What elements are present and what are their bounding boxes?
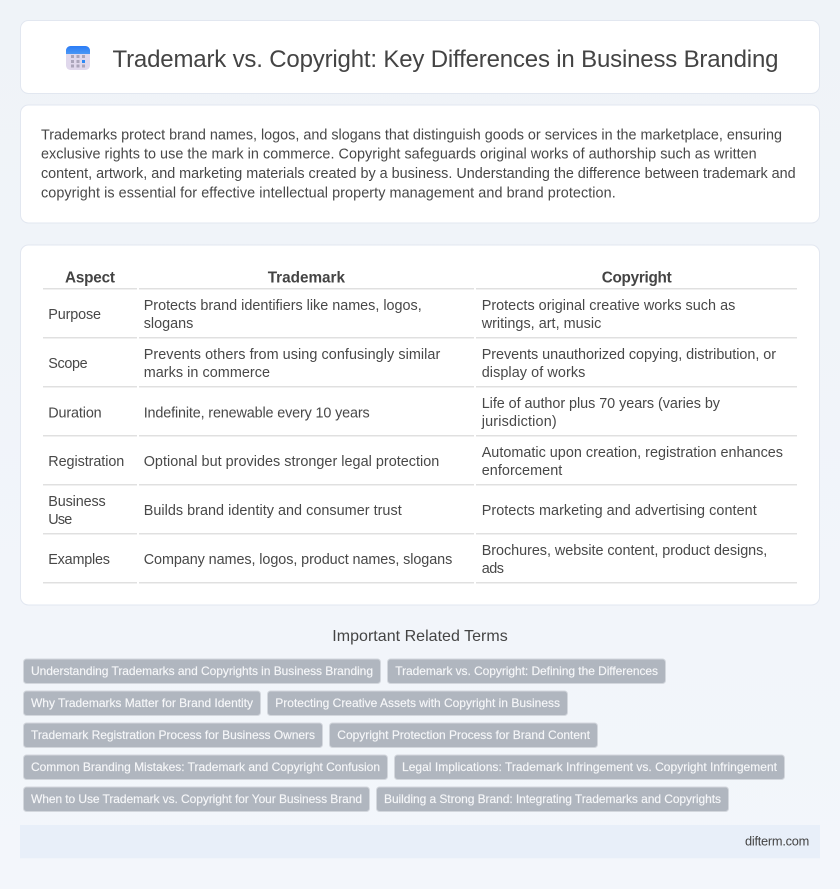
text block: introduction paragraph: exclusive rights to use the mark in commerce. Copyright safeguards original works of authorship such as written [41,147,757,163]
tag [388,659,666,684]
table row: scope: marks in commerce [144,365,270,381]
tag [394,755,784,780]
table header row: Aspect [65,270,115,287]
table row: business use [43,494,797,534]
tag [330,723,598,748]
panel: header [20,20,820,94]
table header row: Trademark [268,270,345,287]
table row: duration [43,396,797,436]
tag: Trademark vs. Copyright: Defining the Differences [395,664,658,678]
table row: examples: Examples [48,552,110,568]
table row: duration: Life of author plus 70 years (varies by [482,396,721,412]
icon: calendar grid [66,46,90,70]
tag: Common Branding Mistakes: Trademark and Copyright Confusion [31,760,380,774]
tag: Why Trademarks Matter for Brand Identity [31,696,253,710]
table header row: Copyright [602,270,672,287]
tag: Copyright Protection Process for Brand Content [337,728,591,742]
tag [268,691,568,716]
heading: important related terms: Important Related Terms [332,628,508,645]
tag [24,787,370,812]
tag [24,723,322,748]
tag [24,755,388,780]
table row: business use: Business [48,494,106,510]
table row: purpose [43,298,797,338]
table row: examples [43,543,797,584]
tag [24,691,260,716]
table row: scope [43,347,797,388]
table row: registration: Registration [48,454,124,470]
table row: registration [43,445,797,486]
table row: registration: Optional but provides stronger legal protection [144,454,439,470]
table row: scope: display of works [482,365,585,381]
table row: scope: Prevents others from using confusingly similar [144,347,441,363]
footer [20,825,820,858]
table header row [43,270,797,290]
table row: purpose: writings, art, music [481,316,601,332]
table row: scope: Scope [48,356,88,372]
panel: introduction [20,105,820,223]
panel: comparison table [20,245,820,605]
tag [376,787,728,812]
table row: duration: Indefinite, renewable every 10 years [144,405,370,421]
tag: When to Use Trademark vs. Copyright for Your Business Brand [31,792,362,806]
table row: duration: Duration [48,405,102,421]
table row: examples: ads [482,561,504,577]
table row: business use: Protects marketing and advertising content [482,503,757,519]
table row: scope: Prevents unauthorized copying, distribution, or [482,347,776,363]
tag: Legal Implications: Trademark Infringement vs. Copyright Infringement [402,760,778,774]
tag list: related terms [24,659,784,812]
table row: duration: jurisdiction) [481,414,557,430]
text block: introduction paragraph [41,127,796,201]
table row: registration: enforcement [482,463,562,479]
table row: registration: Automatic upon creation, registration enhances [482,445,783,461]
footer site name: difterm.com [745,834,809,849]
table row: purpose: slogans [144,316,193,332]
table row: examples: Company names, logos, product names, slogans [144,552,452,568]
title: Trademark vs. Copyright: Key Differences in Business Branding [112,46,778,73]
table row: purpose: Purpose [48,307,101,323]
tag [24,659,380,684]
table row: examples: Brochures, website content, product designs, [482,543,767,559]
table row: purpose: Protects original creative works such as [482,298,735,314]
text block: introduction paragraph: content, artwork, and marketing materials created by a business. Understanding the difference between trademark and [41,166,796,182]
tag: Trademark Registration Process for Business Owners [31,728,315,742]
text block: introduction paragraph: copyright is essential for effective intellectual property management and brand protection. [41,185,616,201]
table row: purpose: Protects brand identifiers like names, logos, [144,298,422,314]
text block: introduction paragraph: Trademarks protect brand names, logos, and slogans that distinguish goods or services in the marketplace, ensuring [41,127,782,143]
tag: Protecting Creative Assets with Copyright in Business [275,696,560,710]
table row: business use: Builds brand identity and consumer trust [144,503,402,519]
table row: business use: Use [48,512,72,528]
tag: Building a Strong Brand: Integrating Trademarks and Copyrights [384,792,721,806]
tag: Understanding Trademarks and Copyrights in Business Branding [31,664,373,678]
